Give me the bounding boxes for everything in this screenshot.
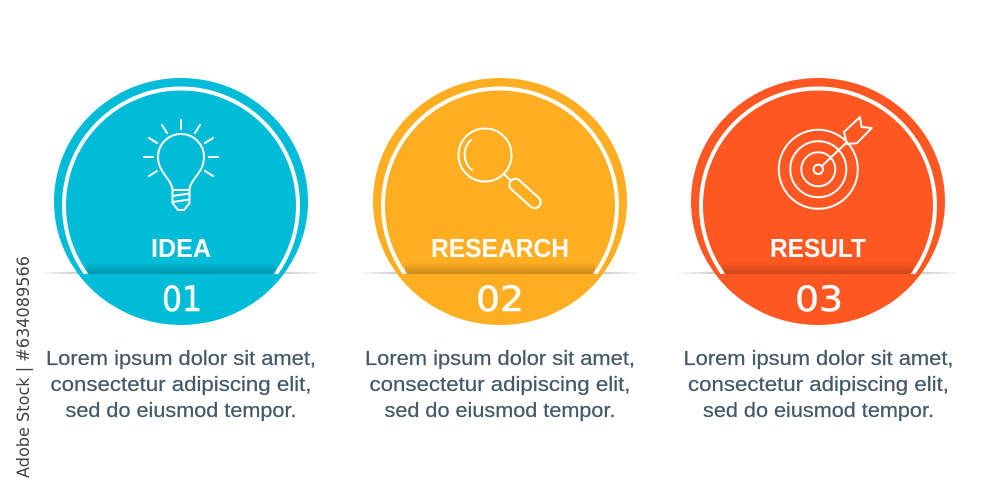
side credit: Adobe Stock | #634089566 [14,256,34,478]
result text: sed do eiusmod tempor. [703,400,934,422]
research text: sed do eiusmod tempor. [384,400,616,422]
icon: light bulb [144,120,218,210]
idea circle [54,78,308,325]
idea number: 01 [162,280,202,320]
research number: 02 [476,280,524,320]
icon: magnifying glass [458,128,543,211]
research text: consectetur adipiscing elit, [370,374,630,396]
idea inner ring [62,86,300,274]
idea heading: IDEA [151,233,211,263]
result number: 03 [795,280,843,320]
result text: Lorem ipsum dolor sit amet, [684,348,954,370]
panel: research [357,78,643,422]
idea fold shadow [86,262,276,274]
result text: consectetur adipiscing elit, [688,374,949,396]
research text: Lorem ipsum dolor sit amet, [365,348,635,370]
result circle [691,78,945,325]
idea text [46,348,316,422]
panel: idea [38,78,324,422]
icon: target with arrow [779,117,872,209]
research circle [373,78,627,325]
result heading: RESULT [770,233,866,263]
panel: result [675,78,961,422]
research fold shadow [405,262,595,274]
result fold shadow [723,262,913,274]
research heading: RESEARCH [431,233,569,263]
idea text: consectetur adipiscing elit, [50,374,312,396]
result inner ring [699,86,937,274]
idea text: sed do eiusmod tempor. [66,400,296,422]
result text [684,348,954,422]
idea text: Lorem ipsum dolor sit amet, [46,348,316,370]
research inner ring [381,86,619,274]
research text [365,348,635,422]
